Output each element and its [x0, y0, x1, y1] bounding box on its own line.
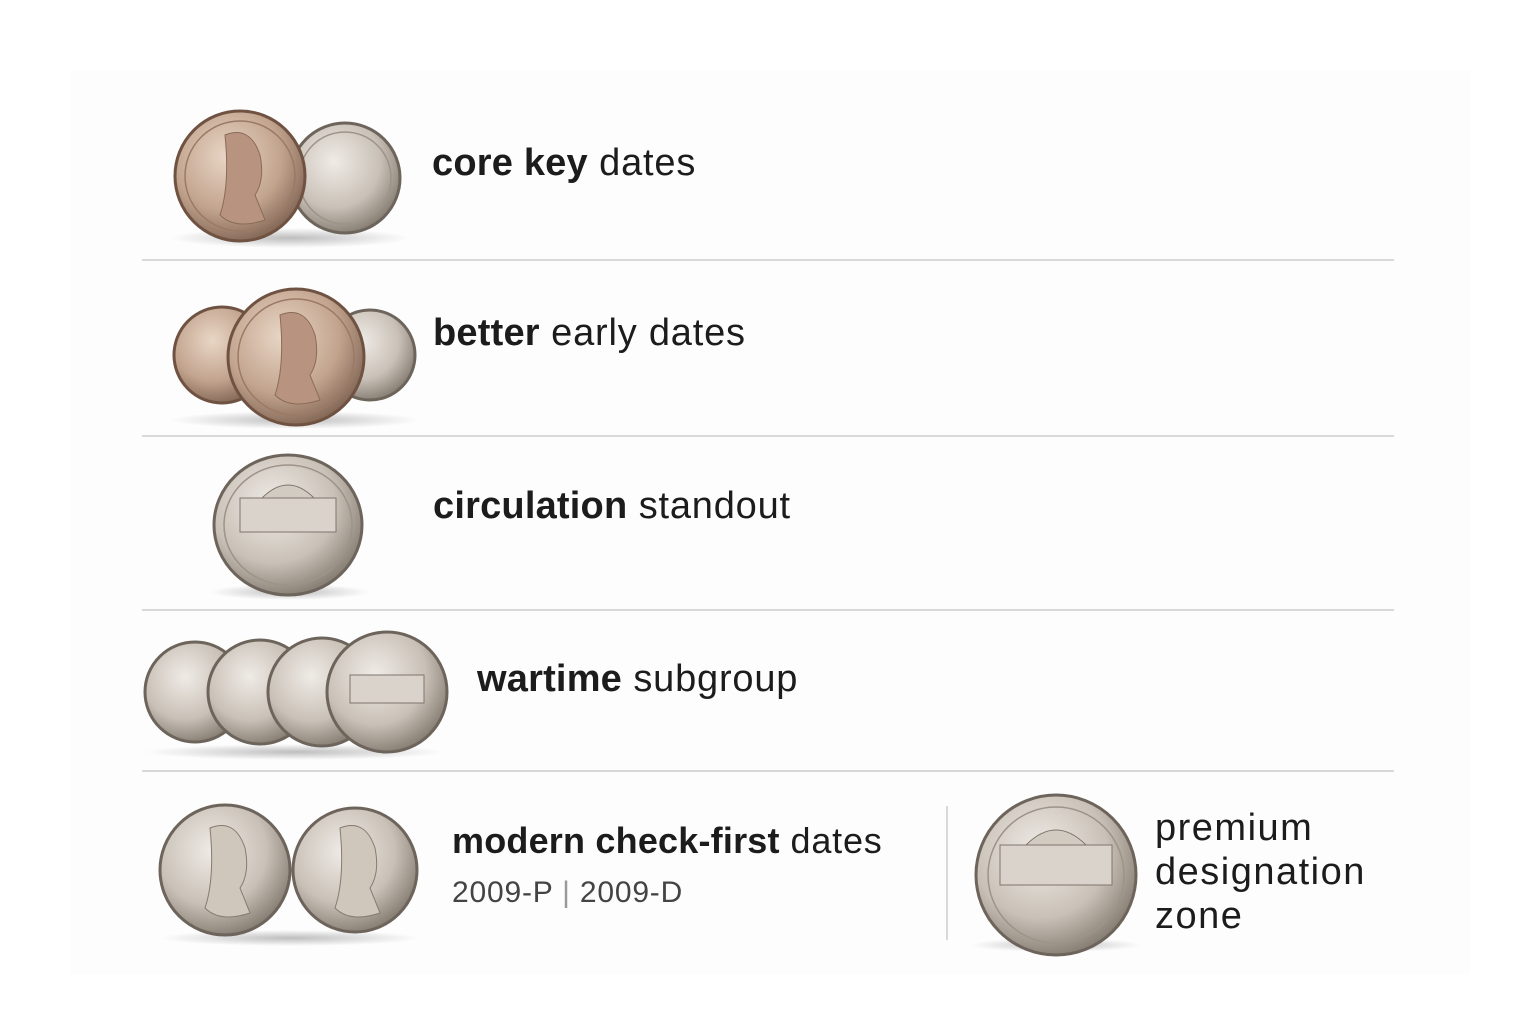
label: 2009 dates: 2009-P | 2009-D	[452, 876, 683, 909]
icon: premium coin	[971, 795, 1141, 955]
label: core key dates: core key dates	[432, 142, 696, 184]
label: modern check-first dates: modern check-first dates	[452, 820, 883, 861]
label: better early dates: better early dates	[433, 312, 746, 354]
icon: better early coins	[170, 289, 420, 429]
label: premium designation zone: premium	[1155, 807, 1313, 849]
icon: core key coins	[170, 111, 410, 248]
label: circulation standout: circulation standout	[433, 485, 791, 527]
icon: circulation standout coin	[210, 455, 370, 600]
label: wartime subgroup: wartime subgroup	[477, 658, 798, 700]
label: premium designation zone: designation	[1155, 851, 1366, 893]
label: premium designation zone	[1155, 807, 1366, 937]
icon: wartime coins	[145, 632, 447, 760]
icon: modern coins	[160, 805, 420, 946]
label: premium designation zone: zone	[1155, 895, 1243, 937]
